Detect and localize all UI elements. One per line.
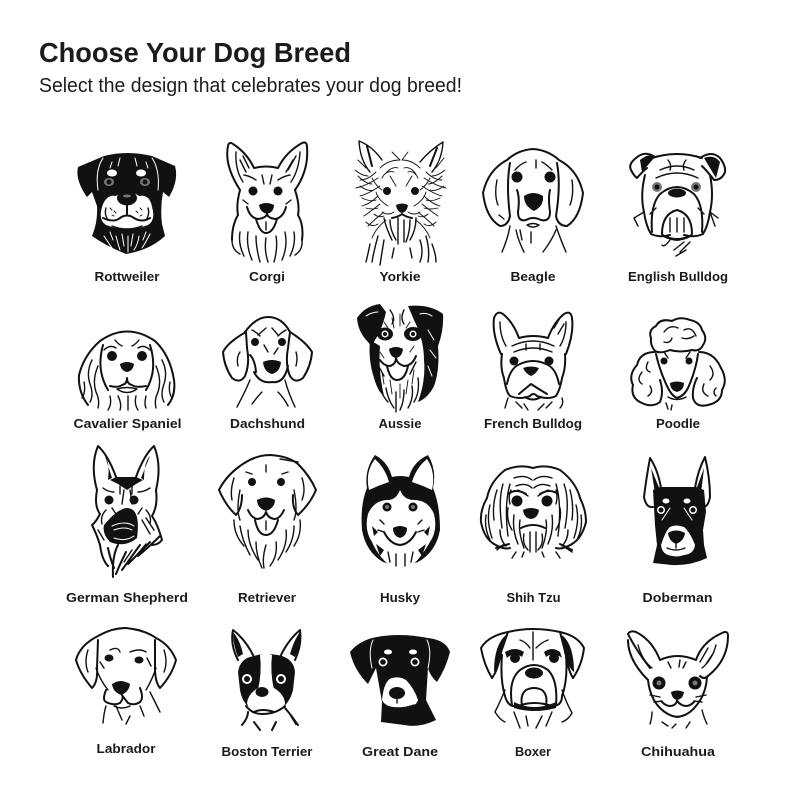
card: German Shepherd — [66, 446, 188, 605]
label: Husky: Husky — [380, 590, 421, 605]
card: French Bulldog — [484, 313, 582, 431]
icon: Boxer head — [481, 629, 584, 728]
icon: Husky head — [362, 455, 440, 568]
icon: Shih Tzu head — [481, 466, 586, 558]
icon: Labrador head — [76, 628, 176, 724]
label: Retriever: Retriever — [238, 590, 296, 605]
label: German Shepherd: German Shepherd — [66, 590, 188, 605]
label: Corgi: Corgi — [249, 269, 285, 284]
icon: Boston Terrier head — [232, 630, 300, 730]
card: Aussie — [357, 304, 443, 431]
icon: Chihuahua head — [628, 631, 728, 728]
label: Yorkie: Yorkie — [380, 269, 420, 284]
label: Dachshund: Dachshund — [230, 416, 305, 431]
label: Boston Terrier: Boston Terrier — [222, 744, 312, 759]
card: Corgi — [227, 142, 307, 284]
card: Rottweiler — [77, 153, 176, 284]
icon: Corgi head — [227, 142, 307, 262]
icon: Retriever head — [219, 455, 316, 568]
icon: English Bulldog head — [630, 154, 725, 256]
card: Boston Terrier — [222, 630, 312, 759]
label: Cavalier Spaniel: Cavalier Spaniel — [74, 416, 182, 431]
card: Great Dane — [350, 635, 450, 759]
label: Poodle: Poodle — [656, 416, 700, 431]
icon: Great Dane head — [350, 635, 450, 726]
label: Chihuahua: Chihuahua — [641, 744, 716, 759]
card: Chihuahua — [628, 631, 728, 759]
icon: Aussie head — [357, 304, 443, 412]
label: Great Dane: Great Dane — [362, 744, 438, 759]
card: Shih Tzu — [481, 466, 586, 605]
icon: Yorkie head — [355, 141, 446, 265]
card: Retriever — [219, 455, 316, 605]
card: Labrador — [76, 628, 176, 756]
icon: French Bulldog head — [494, 313, 572, 410]
card: Poodle — [631, 318, 725, 431]
card: Doberman — [642, 457, 713, 605]
card: Cavalier Spaniel — [74, 332, 182, 431]
card: Husky — [362, 455, 440, 605]
card: English Bulldog — [628, 154, 728, 284]
card: Beagle — [483, 149, 583, 284]
label: English Bulldog: English Bulldog — [628, 269, 728, 284]
title: Choose Your Dog Breed — [39, 37, 351, 68]
label: Doberman: Doberman — [642, 590, 713, 605]
subtitle: Select the design that celebrates your dog breed! — [39, 75, 462, 97]
label: Labrador: Labrador — [96, 741, 156, 756]
card: Boxer — [481, 629, 584, 759]
icon: Doberman head — [644, 457, 710, 565]
card: Dachshund — [223, 317, 312, 431]
card: Yorkie — [355, 141, 446, 284]
icon: Rottweiler head — [77, 153, 176, 254]
label: French Bulldog: French Bulldog — [484, 416, 582, 431]
label: Rottweiler: Rottweiler — [94, 269, 160, 284]
label: Beagle: Beagle — [510, 269, 556, 284]
icon: Poodle head — [631, 318, 725, 410]
icon: Dachshund head — [223, 317, 312, 407]
icon: Beagle head — [483, 149, 583, 252]
icon: Cavalier Spaniel head — [79, 332, 174, 410]
label: Boxer: Boxer — [515, 744, 551, 759]
icon: German Shepherd head — [92, 446, 162, 577]
label: Shih Tzu: Shih Tzu — [506, 590, 561, 605]
label: Aussie: Aussie — [378, 416, 422, 431]
